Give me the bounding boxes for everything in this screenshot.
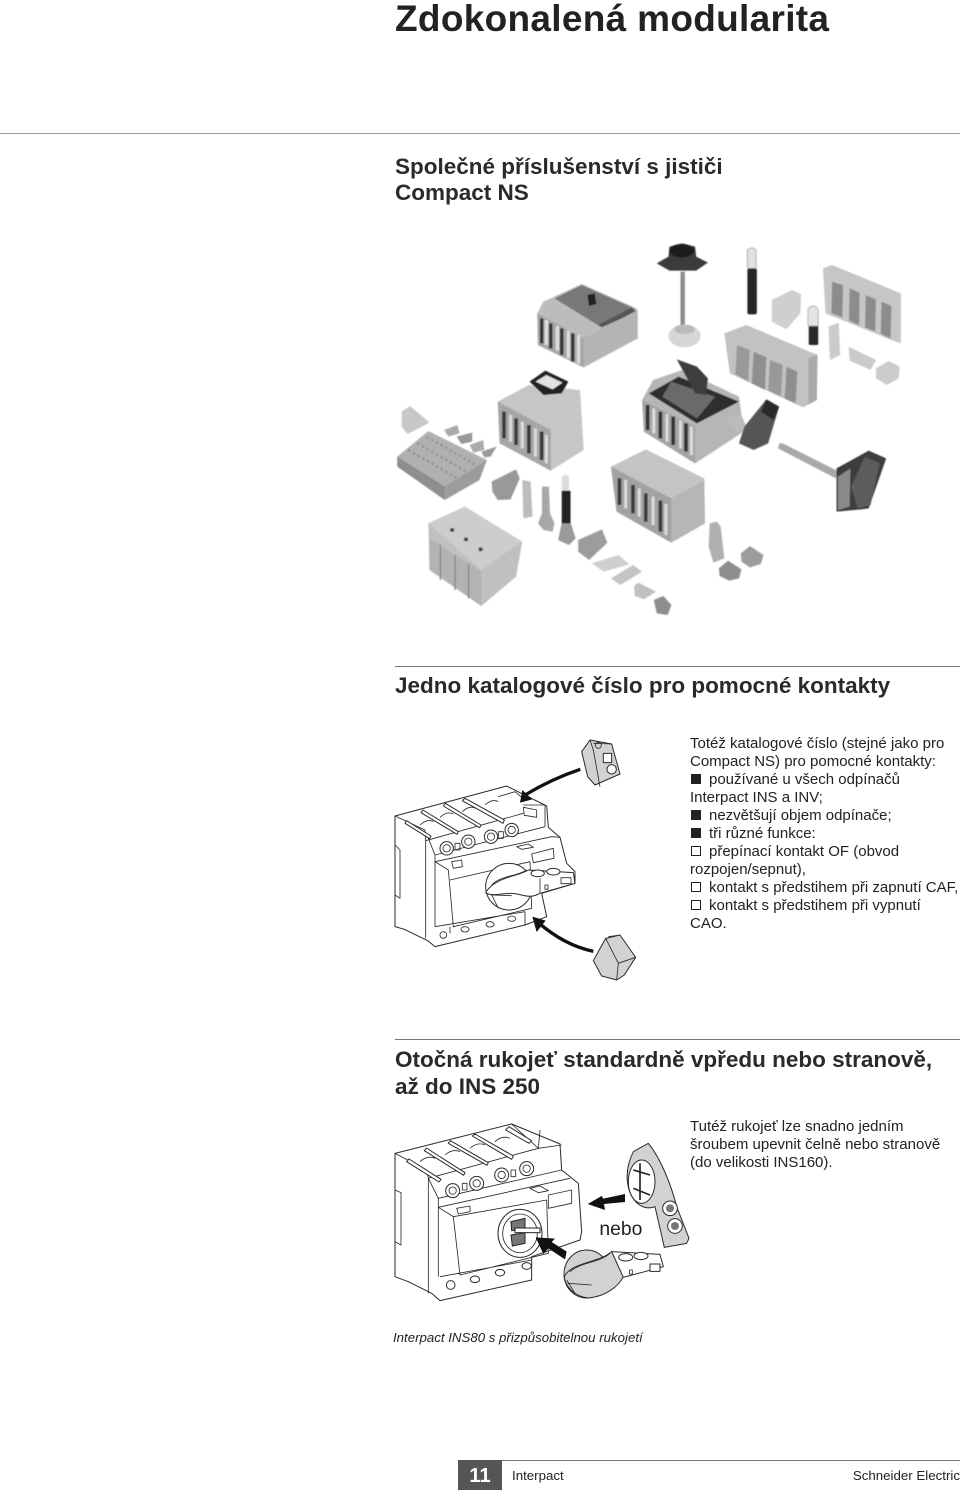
breaker top centre-left [537, 284, 638, 367]
caption: Interpact INS80 s přizpůsobitelnou rukojetí [393, 1330, 644, 1345]
front handle [564, 1250, 663, 1298]
auxiliary contact top [582, 740, 620, 787]
product photo: accessories set [397, 243, 901, 615]
short terminal bar [808, 306, 818, 345]
small parts lower centre [592, 522, 763, 615]
long terminal bar [747, 248, 757, 314]
text block: auxiliary contacts [690, 735, 958, 932]
closed terminal cover lower left [428, 507, 522, 606]
side handle [627, 1143, 689, 1247]
terminal shield middle right [724, 325, 818, 407]
breaker rear lower centre [611, 449, 705, 543]
text block: auxiliary contacts: používané u všech odpínačů [709, 771, 900, 788]
text block: auxiliary contacts: kontakt s předstihem při zapnutí CAF, [709, 879, 958, 896]
heading: single catalogue number: Jedno katalogové číslo pro pomocné kontakty [395, 673, 891, 698]
text block: handle: Tutéž rukojeť lze snadno jedním [690, 1118, 904, 1135]
handle mount [498, 1209, 542, 1257]
arrow to side handle [588, 1194, 625, 1210]
line drawing: switch with adaptable handle [395, 1124, 689, 1301]
text block: auxiliary contacts: rozpojen/sepnut), [690, 861, 806, 878]
text block: handle: (do velikosti INS160). [690, 1154, 833, 1171]
switch body [395, 786, 575, 947]
perforated cover left [397, 425, 497, 500]
switch with dark cover [642, 359, 779, 463]
footer: Interpact [512, 1468, 564, 1483]
cage clamp [492, 469, 520, 500]
footer [458, 1460, 960, 1490]
label nebo: nebo [599, 1219, 642, 1240]
text block: handle [690, 1118, 940, 1171]
terminal shield upper right [823, 265, 901, 343]
text block: auxiliary contacts: kontakt s předstihem při vypnutí [709, 897, 922, 914]
small brackets upper right [828, 323, 900, 385]
arrow top [520, 769, 580, 803]
heading: common accessories: Společné příslušenství s jističi [395, 154, 723, 179]
auxiliary contact bottom [593, 935, 636, 980]
text block: auxiliary contacts: Totéž katalogové číslo (stejné jako pro [690, 735, 944, 752]
arrow to front handle [536, 1237, 567, 1259]
text block: auxiliary contacts: Interpact INS a INV; [690, 789, 823, 806]
line drawing: switch with auxiliary contacts [395, 740, 636, 980]
footer: Schneider Electric [853, 1468, 960, 1483]
bracket far left [402, 406, 429, 434]
page number box [458, 1460, 502, 1490]
heading: common accessories: Compact NS [395, 180, 529, 205]
lugs and terminals row [522, 475, 607, 560]
heading: rotary handle [395, 1047, 932, 1099]
arrow bottom [532, 917, 593, 951]
breaker left middle [498, 371, 584, 471]
side handle with long shaft [778, 443, 886, 512]
rotary handle with shaft [657, 243, 708, 347]
heading: rotary handle: Otočná rukojeť standardně vpředu nebo stranově, [395, 1047, 932, 1072]
heading: rotary handle: až do INS 250 [395, 1074, 540, 1099]
text block: auxiliary contacts: přepínací kontakt OF (obvod [709, 843, 899, 860]
clip connector [772, 290, 801, 329]
switch body [395, 1124, 582, 1301]
page number box: 11 [469, 1465, 491, 1487]
rotary handle [486, 863, 575, 910]
heading: common accessories [395, 154, 723, 205]
text block: auxiliary contacts: tři různé funkce: [709, 825, 816, 842]
text block: auxiliary contacts: Compact NS) pro pomocné kontakty: [690, 753, 936, 770]
text block: auxiliary contacts: nezvětšují objem odpínače; [709, 807, 892, 824]
text block: auxiliary contacts: CAO. [690, 915, 727, 932]
text block: handle: šroubem upevnit čelně nebo stranově [690, 1136, 940, 1153]
